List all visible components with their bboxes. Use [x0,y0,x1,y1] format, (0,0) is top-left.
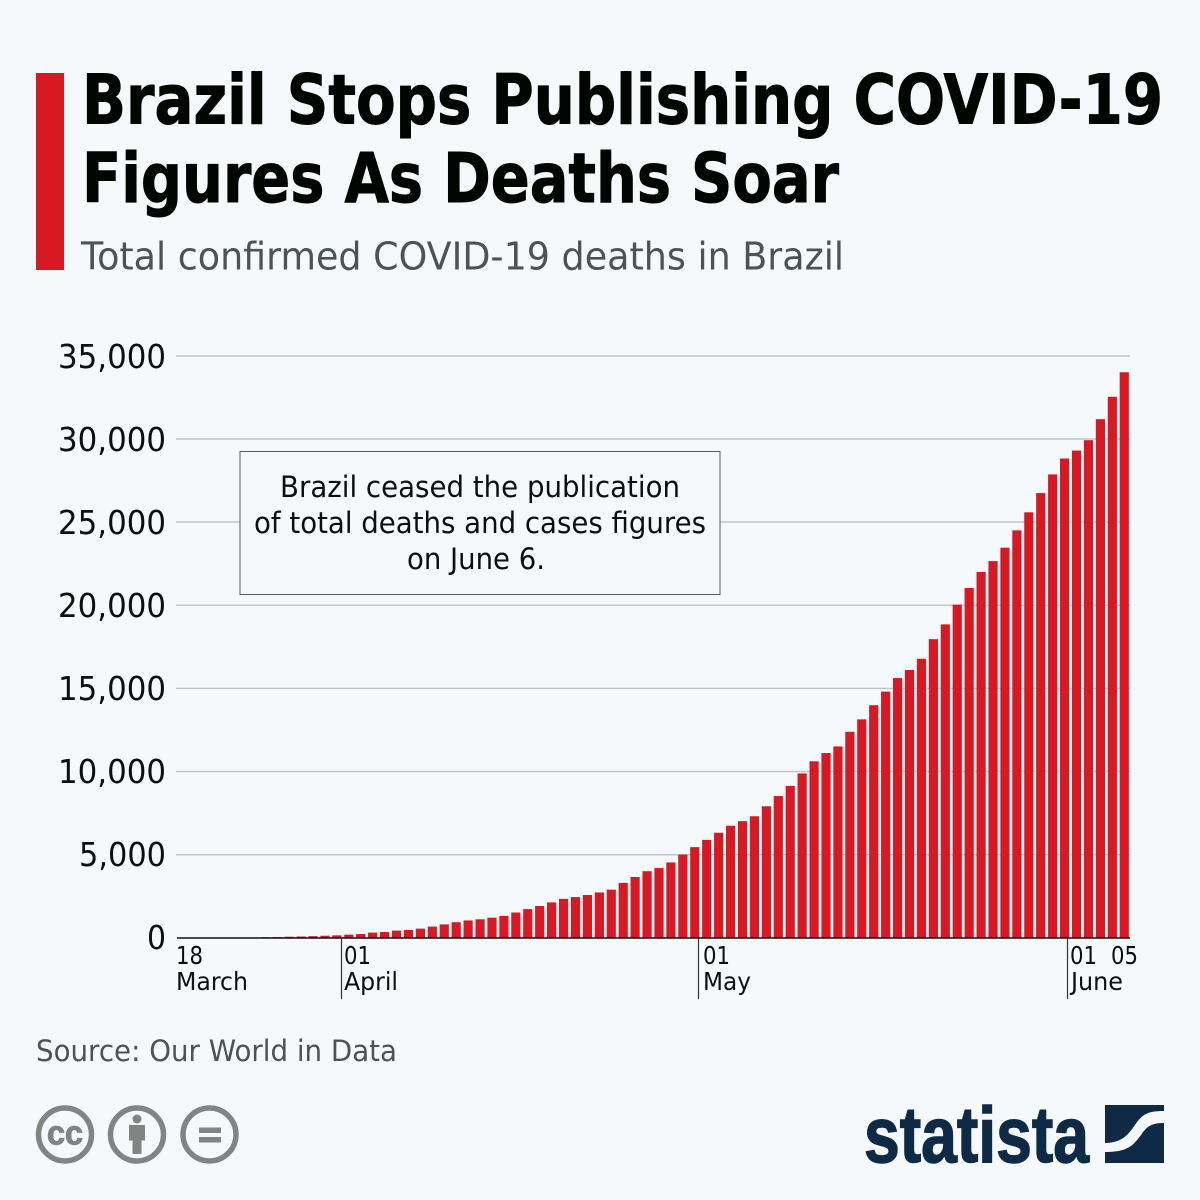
x axis line [177,937,1130,939]
title: Figures As Deaths Soar [82,139,839,219]
x axis labels: 01 [344,941,371,970]
icon: attribution [110,1108,164,1161]
callout: of total deaths and cases figures [254,506,706,540]
y axis labels: 20,000 [58,586,166,625]
x axis labels: April [344,967,398,996]
accent bar [36,73,64,270]
callout: Brazil ceased the publication [280,470,680,504]
x axis labels: 18 [176,941,203,970]
logo: statista: statista [864,1090,1090,1179]
icon: creative commons [38,1108,92,1161]
x axis labels: 01 [703,941,730,970]
x axis labels: June [1069,967,1123,996]
y axis labels: 30,000 [58,420,166,459]
x axis labels [176,941,1138,996]
subtitle: Total confirmed COVID-19 deaths in Brazil [80,234,844,278]
y axis labels: 15,000 [58,669,166,708]
month ticks [342,938,1068,999]
x axis labels: 01 [1070,941,1097,970]
bar chart: total confirmed deaths [177,372,1129,938]
icon: creative commons: cc [47,1114,83,1152]
callout: on June 6. [407,542,545,576]
icon: no derivatives [183,1108,236,1161]
y axis labels [58,337,166,957]
gridlines [176,356,1130,855]
source: Source: Our World in Data [36,1034,397,1068]
x axis labels: 05 [1111,941,1138,970]
y axis labels: 0 [147,918,166,957]
title [82,60,1163,219]
x axis labels: May [703,967,751,996]
y axis labels: 10,000 [58,752,166,791]
y axis labels: 5,000 [79,835,166,874]
y axis labels: 35,000 [58,337,166,376]
y axis labels: 25,000 [58,503,166,542]
callout [240,452,720,594]
x axis labels: March [176,967,248,996]
